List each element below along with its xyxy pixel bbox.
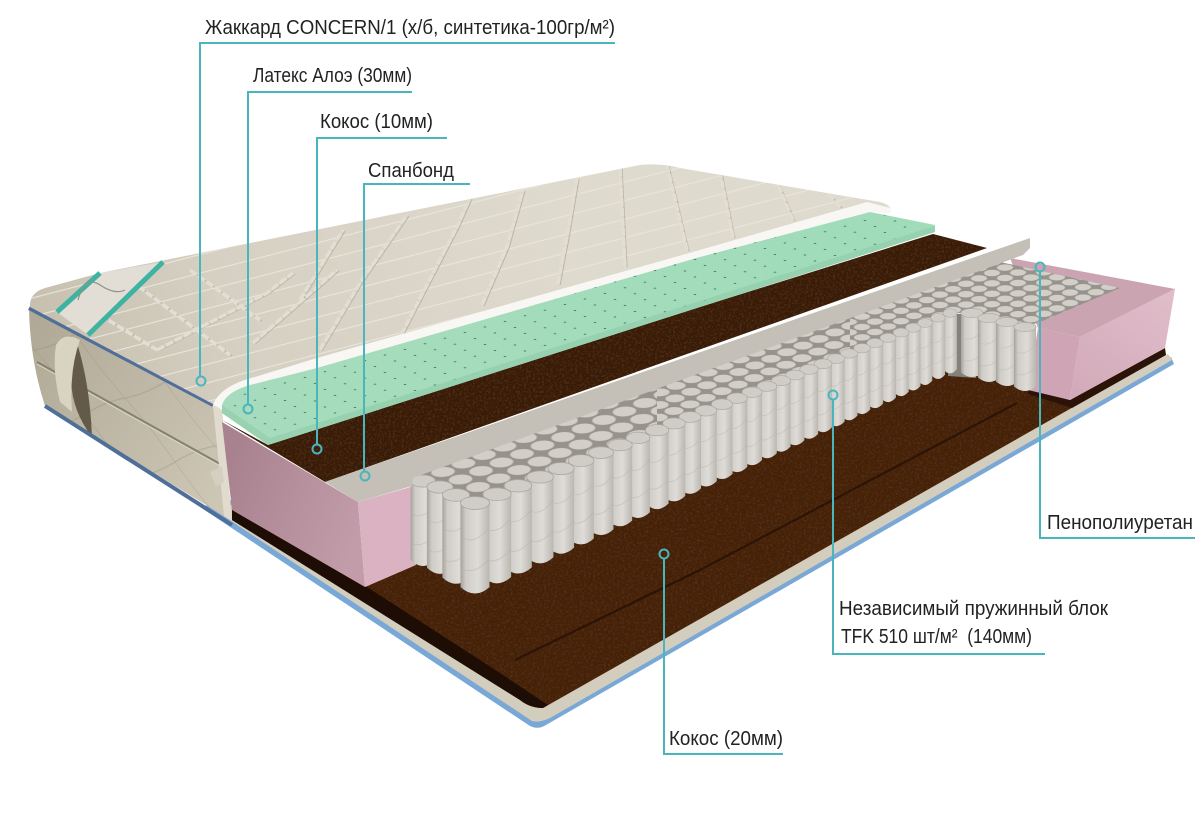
quilting seams: [100, 165, 842, 356]
callout: jacquard: Жаккард CONCERN/1 (х/б, синтетика-100гр/м²): [205, 17, 615, 39]
callout: coconut 20 mm: [660, 550, 783, 754]
mattress illustration: [29, 164, 1175, 728]
lower coconut layer: [232, 320, 1165, 708]
callout: spunbond: Спанбонд: [368, 160, 454, 182]
callout: spunbond: [360, 160, 470, 480]
base layer: blue edge and beige border: [200, 354, 1174, 728]
quilted jacquard top: [30, 164, 890, 404]
callout: polyurethane foam: [1036, 262, 1195, 538]
notch wall: [948, 313, 976, 378]
latex aloe layer: [222, 212, 935, 445]
callout: pocket spring block: [828, 390, 1108, 654]
spring tops: [413, 255, 1120, 503]
callout: latex aloe: Латекс Алоэ (30мм): [253, 65, 412, 87]
foam block, right end: [1010, 258, 1175, 408]
front-row pocket springs: [411, 309, 957, 593]
white layer edge: [213, 202, 891, 410]
foam block, left end: [222, 422, 416, 587]
callout: pocket spring block: Независимый пружинный блок: [839, 598, 1108, 620]
callout: jacquard: [196, 17, 615, 386]
brand band: [57, 262, 163, 335]
spanbond sheet: [325, 238, 1030, 502]
callout: pocket spring block: TFK 510 шт/м² (140мм): [841, 626, 1032, 648]
callout: coconut 10 mm: [312, 111, 447, 454]
callout: latex aloe: [244, 65, 412, 414]
callout: coconut 20 mm: Кокос (20мм): [669, 728, 783, 750]
callout: polyurethane foam: Пенополиуретан: [1047, 512, 1193, 534]
callout: coconut 10 mm: Кокос (10мм): [320, 111, 433, 133]
side panel with handle: [29, 308, 232, 525]
upper coconut layer: [222, 234, 987, 482]
spring block: [411, 255, 1120, 593]
end-row pocket springs: [961, 308, 1036, 391]
